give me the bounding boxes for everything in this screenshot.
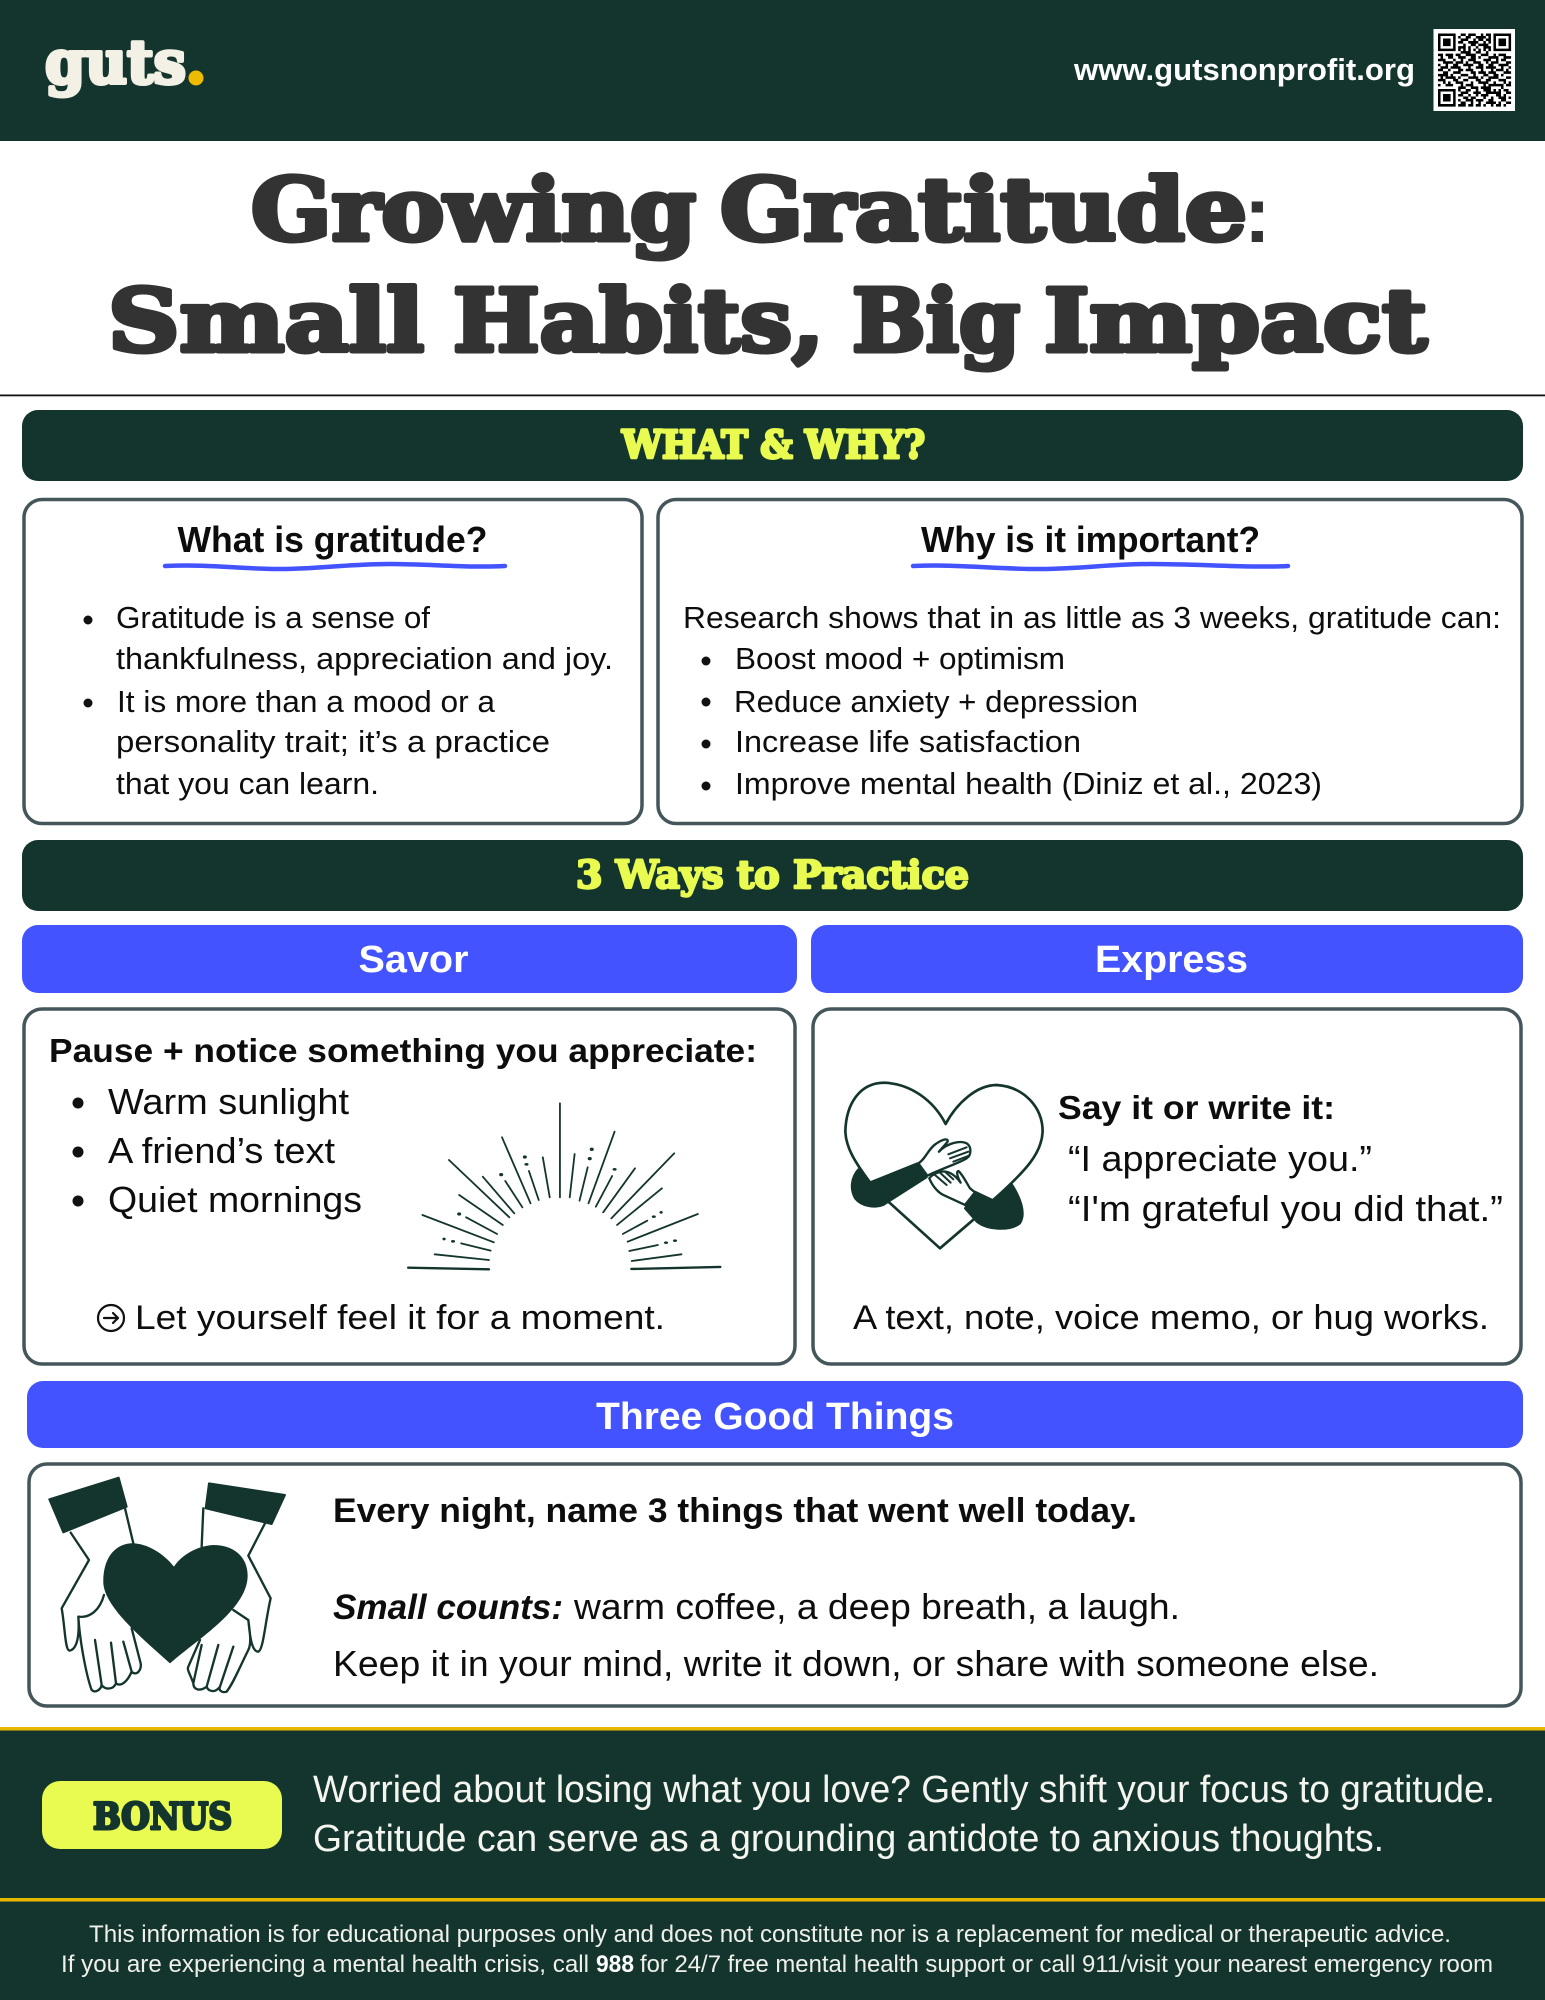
bonus pill: BONUS	[93, 1796, 232, 1838]
express quotes: “I'm grateful you did that.”	[1068, 1188, 1503, 1229]
panel: three good things	[29, 1464, 1521, 1706]
small counts line: warm coffee, a deep breath, a laugh.	[573, 1586, 1180, 1627]
express quotes: “I appreciate you.”	[1068, 1138, 1372, 1179]
title: Big	[852, 271, 1020, 372]
heading: what is gratitude: What is gratitude?	[178, 519, 488, 560]
hand-drawn underline	[165, 564, 505, 569]
footer disclaimer: for 24/7 free mental health support or call 911/visit your nearest emergency room	[640, 1951, 1493, 1978]
bullet list: that you can learn.	[116, 766, 379, 801]
benefits list: Reduce anxiety + depression	[734, 684, 1138, 719]
bonus text: Gratitude can serve as a grounding antidote to anxious thoughts.	[313, 1818, 1384, 1860]
panel: why is it important	[658, 500, 1522, 824]
express quotes	[1068, 1138, 1503, 1229]
research intro: Research shows that in as little as 3 weeks, gratitude can:	[683, 600, 1501, 635]
bullet list: thankfulness, appreciation and joy.	[116, 641, 613, 676]
savor list	[72, 1081, 362, 1220]
three good things lead: Every night, name 3 things that went well today.	[333, 1492, 1137, 1530]
bullet list: personality trait; it’s a practice	[116, 724, 550, 759]
footer disclaimer: If you are experiencing a mental health crisis, call	[61, 1951, 589, 1978]
savor lead: Pause + notice something you appreciate:	[49, 1032, 757, 1069]
title: Gratitude	[720, 160, 1247, 261]
heading: why is it important: Why is it important?	[921, 519, 1260, 560]
heading bar: three good things: Three Good Things	[596, 1396, 954, 1438]
express lead: Say it or write it:	[1058, 1089, 1335, 1126]
panel: savor	[24, 1009, 795, 1364]
small counts line	[333, 1586, 1180, 1627]
logo: guts: guts	[45, 28, 186, 98]
hand-drawn underline	[913, 564, 1288, 569]
section bar: 3 ways to practice: 3 Ways to Practice	[576, 852, 969, 897]
small counts line: Small counts:	[333, 1588, 563, 1627]
savor list: A friend’s text	[108, 1130, 335, 1171]
heading bar: savor	[22, 925, 797, 993]
benefits list: Improve mental health (Diniz et al., 2023)	[735, 766, 1322, 801]
heading bar: express	[811, 925, 1523, 993]
benefits list: Boost mood + optimism	[735, 641, 1065, 676]
section bar: what and why	[22, 410, 1523, 481]
savor list: Warm sunlight	[108, 1081, 349, 1122]
bullet list	[84, 600, 613, 801]
keep it line: Keep it in your mind, write it down, or share with someone else.	[333, 1643, 1379, 1684]
panel: what is gratitude	[24, 500, 642, 824]
title: Habits,	[453, 271, 824, 372]
icon: sunrise rays	[408, 1103, 720, 1269]
savor list: Quiet mornings	[108, 1179, 362, 1220]
bullet list: It is more than a mood or a	[117, 684, 496, 719]
title: Small	[108, 271, 424, 372]
footer disclaimer: 988	[596, 1951, 634, 1978]
title: :	[1244, 170, 1271, 259]
benefits list	[702, 641, 1322, 801]
website url: www.gutsnonprofit.org	[1073, 52, 1415, 87]
bullet list: Gratitude is a sense of	[116, 600, 430, 635]
section bar: what and why: WHAT & WHY?	[621, 422, 925, 467]
bonus pill	[42, 1781, 282, 1849]
express closing line: A text, note, voice memo, or hug works.	[853, 1299, 1489, 1337]
title	[108, 160, 1427, 372]
QR code	[1434, 29, 1515, 111]
title: Growing	[251, 160, 696, 261]
footer disclaimer: This information is for educational purposes only and does not constitute nor is a replacement for medical or therapeutic advice.	[89, 1921, 1451, 1948]
icon: hands holding a heart	[49, 1478, 285, 1692]
bonus text: Worried about losing what you love? Gently shift your focus to gratitude.	[313, 1769, 1495, 1811]
heading bar: savor: Savor	[358, 939, 469, 981]
icon: arrow in circle	[98, 1305, 124, 1331]
icon: arms hugging a heart	[845, 1083, 1043, 1248]
heading bar: three good things	[27, 1381, 1523, 1448]
benefits list: Increase life satisfaction	[735, 724, 1081, 759]
bonus band	[0, 1727, 1545, 2000]
panel: express	[813, 1009, 1521, 1364]
header band	[0, 0, 1545, 141]
footer disclaimer	[61, 1921, 1493, 1978]
heading bar: express: Express	[1095, 939, 1248, 981]
savor closing line: Let yourself feel it for a moment.	[135, 1299, 665, 1337]
title: Impact	[1044, 271, 1427, 372]
bonus text	[313, 1769, 1495, 1860]
section bar: 3 ways to practice	[22, 840, 1523, 911]
